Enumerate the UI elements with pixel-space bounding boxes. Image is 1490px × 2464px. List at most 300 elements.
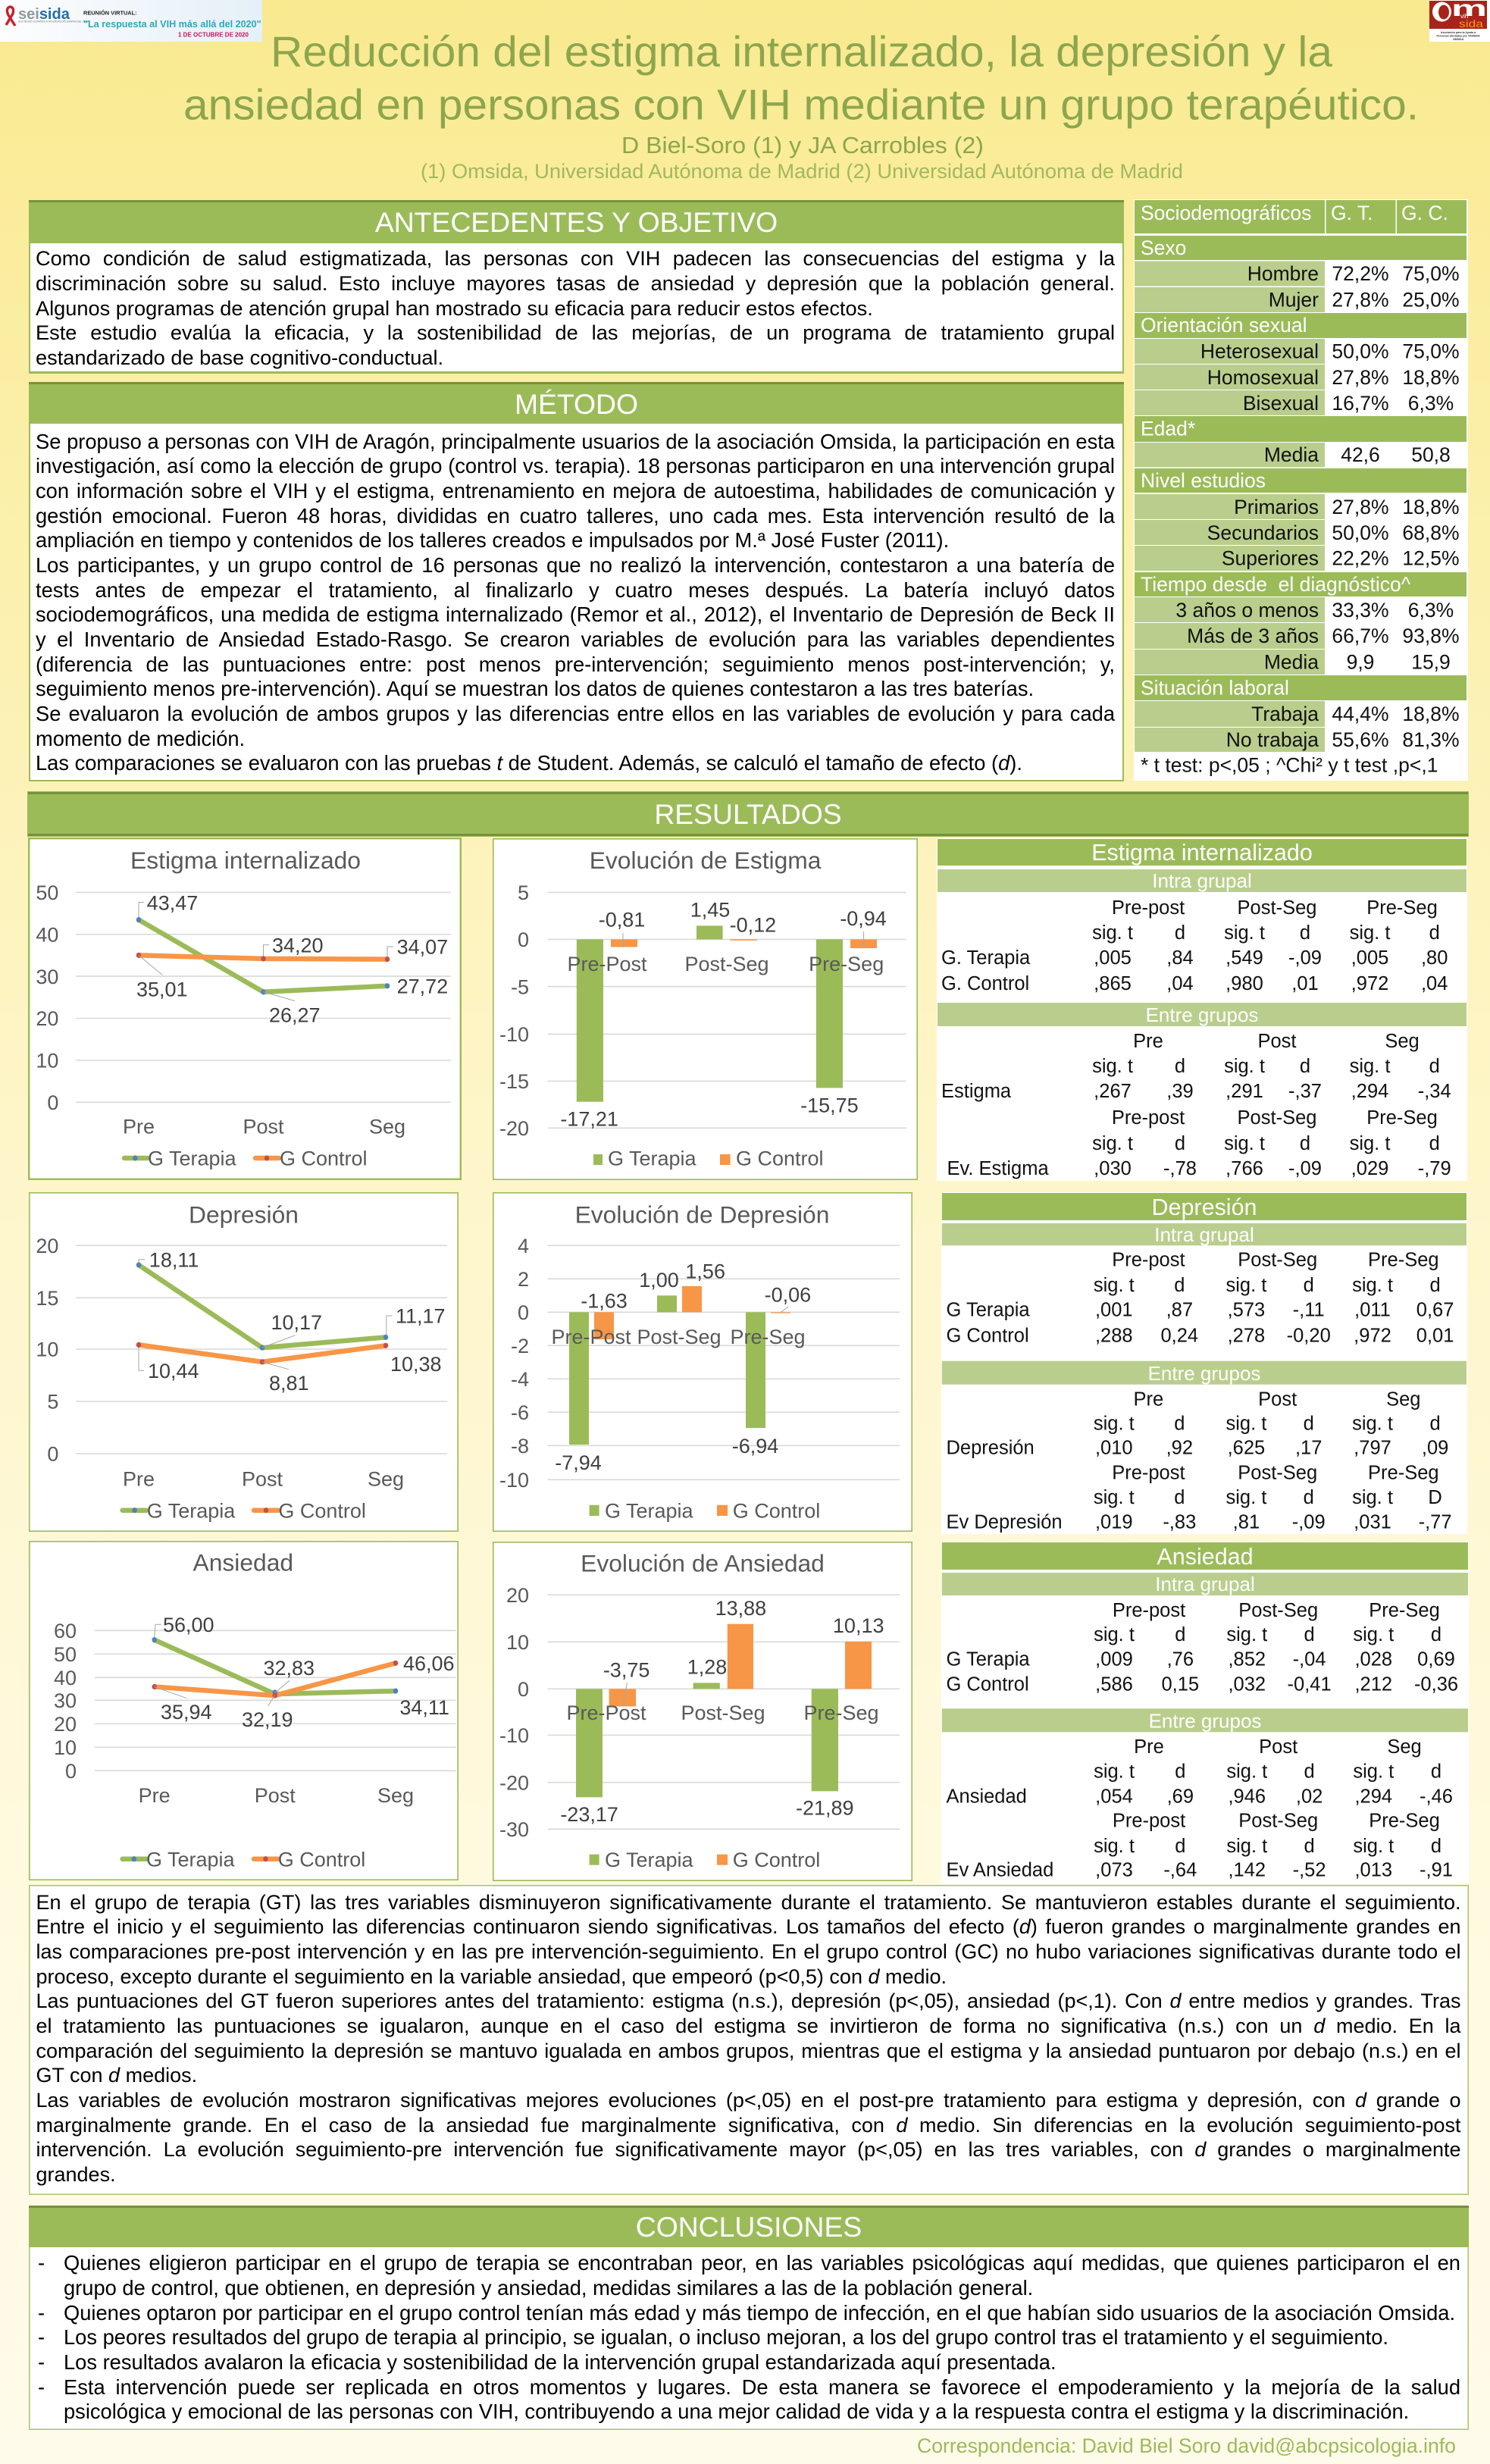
table: estigma internalizado: d — [1300, 1056, 1310, 1077]
panel: conclusiones: - — [38, 2350, 45, 2374]
chart: evolución de depresión: G Terapia — [605, 1499, 694, 1522]
table: estigma internalizado: ,291 — [1225, 1081, 1263, 1102]
table: ansiedad: Post-Seg — [1238, 1811, 1318, 1832]
chart: evolución de depresión: 4 — [518, 1235, 529, 1257]
chart: evolución de estigma: Pre-Seg — [809, 953, 884, 975]
chart: evolución de depresión: -0,06 — [765, 1283, 811, 1306]
chart: ansiedad: 32,83 — [264, 1657, 315, 1680]
chart: ansiedad: 56,00 — [163, 1614, 214, 1636]
table: ansiedad: Post — [1259, 1736, 1297, 1758]
table: estigma internalizado: sig. t — [1350, 1133, 1390, 1154]
text block: resultados discussion: las comparaciones pre-post intervención y en las pre intervención-seguimiento. En el grupo control (GC) no hubo variaciones significativas durante todo el — [36, 1940, 1461, 1963]
table: sociodemográficos: 3 años o menos — [1175, 599, 1319, 621]
chart: ansiedad — [29, 1541, 459, 1880]
table: sociodemográficos: 15,9 — [1411, 650, 1451, 673]
chart: evolución de estigma: -17,21 — [560, 1108, 618, 1131]
chart: evolución de ansiedad: 10,13 — [833, 1614, 884, 1637]
table: depresión: ,625 — [1228, 1437, 1265, 1458]
chart: evolución de depresión: -7,94 — [555, 1451, 602, 1474]
table: sociodemográficos: 27,8% — [1332, 366, 1389, 389]
text block: resultados discussion: marginalmente grande. En el caso de la ansiedad fue marginalmente significativa, con d medio. Sin diferencias en la evolución seguimiento-post — [36, 2114, 1461, 2137]
chart: evolución de ansiedad: 13,88 — [715, 1597, 766, 1620]
table: estigma internalizado: ,005 — [1351, 947, 1388, 969]
table: ansiedad: d — [1175, 1761, 1185, 1783]
table: estigma internalizado: d — [1300, 922, 1310, 944]
chart: estigma internalizado: 50 — [36, 881, 58, 904]
table: ansiedad: d — [1431, 1836, 1441, 1857]
text block: método: gestión emocional. Fueron 48 horas, divididas en cuatro talleres, uno cada mes. Esta intervención resultó de la — [36, 504, 1115, 528]
panel: conclusiones: - — [38, 2325, 45, 2349]
chart: evolución de depresión: -4 — [511, 1368, 529, 1391]
chart: depresión: 8,81 — [269, 1372, 309, 1395]
table: sociodemográficos: Edad* — [1141, 417, 1195, 440]
table: ansiedad: -,46 — [1420, 1786, 1453, 1807]
chart: estigma internalizado: 0 — [47, 1091, 58, 1114]
table: depresión: Post-Seg — [1238, 1250, 1317, 1271]
chart: evolución de ansiedad: -30 — [499, 1818, 529, 1841]
logo: omsida: vih — [1460, 13, 1468, 20]
table: estigma internalizado: -,79 — [1418, 1158, 1451, 1179]
text block: resultados discussion: proceso, excepto durante el seguimiento en la variable ansiedad, que empeoró (p<0,5) con d medio. — [36, 1965, 947, 1988]
chart: estigma internalizado: 26,27 — [269, 1004, 321, 1027]
text block: conclusiones: Los resultados avalaron la eficacia y sostenibilidad de la intervención grupal estandarizada aquí presentada. — [64, 2350, 1056, 2374]
chart: evolución de estigma — [493, 838, 918, 1180]
text block: resultados discussion — [36, 1891, 1461, 2186]
table: depresión: sig. t — [1225, 1275, 1266, 1296]
table: estigma internalizado: Pre-post — [1112, 897, 1185, 919]
table: sociodemográficos: * t test: p<,05 ; ^Chi² y t test ,p<,1 — [1141, 753, 1438, 776]
table: sociodemográficos: 18,8% — [1402, 366, 1460, 389]
chart: depresión: Pre — [123, 1467, 155, 1490]
text block: método: momento de medición. — [36, 727, 245, 750]
chart: estigma internalizado: 30 — [36, 966, 58, 988]
table: estigma internalizado: ,294 — [1351, 1081, 1388, 1102]
table: estigma internalizado: sig. t — [1350, 922, 1390, 944]
table: depresión: -,77 — [1419, 1511, 1452, 1533]
table: sociodemográficos: 72,2% — [1332, 262, 1389, 285]
table: depresión: sig. t — [1352, 1414, 1393, 1435]
table: sociodemográficos: 50,0% — [1332, 521, 1389, 544]
table: sociodemográficos: 18,8% — [1402, 703, 1460, 725]
table: estigma internalizado: Post — [1257, 1031, 1297, 1052]
chart: evolución de ansiedad: -20 — [499, 1771, 529, 1794]
text block: resultados discussion: En el grupo de terapia (GT) las tres variables disminuyeron significativamente durante el tratamiento. Se mantuvieron estables durante el seguimiento. — [36, 1891, 1461, 1914]
table: estigma internalizado: sig. t — [1092, 1056, 1133, 1077]
chart: evolución de estigma: -5 — [511, 975, 529, 998]
table: ansiedad: Pre-Seg — [1369, 1600, 1440, 1621]
table: ansiedad: d — [1431, 1624, 1441, 1645]
table: depresión: ,81 — [1233, 1511, 1260, 1533]
panel: conclusiones: - — [38, 2251, 45, 2275]
text block: método: Los participantes, y un grupo control de 16 personas que no realizó la intervención, contestaron a una batería de — [36, 553, 1115, 577]
table: ansiedad: ,009 — [1095, 1648, 1133, 1670]
chart: depresión — [29, 1192, 459, 1532]
table: ansiedad: Intra grupal — [1155, 1573, 1255, 1595]
text block: resultados discussion: GT con d medios. — [36, 2064, 197, 2087]
table: estigma internalizado: ,766 — [1225, 1158, 1263, 1179]
table: depresión: d — [1174, 1414, 1185, 1435]
table: ansiedad: ,294 — [1354, 1786, 1392, 1807]
chart: estigma internalizado: Seg — [369, 1116, 405, 1138]
table: sociodemográficos: 6,3% — [1408, 599, 1454, 621]
table: ansiedad: d — [1304, 1624, 1315, 1645]
table: depresión: ,09 — [1422, 1437, 1448, 1458]
table: estigma internalizado: Entre grupos — [1146, 1003, 1258, 1026]
table: depresión: -,83 — [1163, 1511, 1196, 1533]
table: depresión: G Control — [946, 1326, 1029, 1347]
chart: depresión: 15 — [36, 1287, 58, 1310]
table: estigma internalizado: ,005 — [1094, 947, 1132, 969]
table: sociodemográficos: Nivel estudios — [1141, 469, 1266, 492]
table: ansiedad: sig. t — [1226, 1624, 1267, 1645]
table: estigma internalizado: d — [1429, 1133, 1440, 1154]
table: ansiedad: sig. t — [1353, 1836, 1394, 1857]
table: ansiedad: ,69 — [1167, 1786, 1194, 1807]
panel: antecedentes y objetivo — [29, 200, 1124, 374]
chart: estigma internalizado: 10 — [36, 1050, 58, 1072]
table: estigma internalizado: ,80 — [1421, 947, 1448, 969]
table: depresión: d — [1304, 1487, 1314, 1508]
table: estigma internalizado: ,865 — [1094, 973, 1132, 994]
table: sociodemográficos: 55,6% — [1332, 728, 1389, 751]
table: ansiedad: Pre-post — [1113, 1600, 1185, 1621]
table: estigma internalizado: d — [1429, 922, 1440, 944]
logo: omsida — [1429, 0, 1490, 42]
table: estigma internalizado: sig. t — [1224, 922, 1265, 944]
table: depresión: d — [1430, 1275, 1441, 1296]
table: depresión: sig. t — [1094, 1275, 1135, 1296]
table: ansiedad: ,212 — [1354, 1674, 1392, 1695]
panel: conclusiones — [29, 2206, 1469, 2430]
table: estigma internalizado: Post-Seg — [1238, 897, 1316, 919]
text block: conclusiones — [38, 2251, 1460, 2423]
chart: ansiedad: 46,06 — [403, 1652, 455, 1675]
table: estigma internalizado: sig. t — [1092, 922, 1133, 944]
text block: antecedentes: estandarizado de base cognitivo-conductual. — [36, 346, 443, 369]
chart: evolución de estigma: 1,45 — [690, 899, 730, 922]
table: ansiedad: ,013 — [1354, 1860, 1392, 1881]
panel: método — [29, 382, 1124, 781]
chart: evolución de ansiedad: 1,28 — [687, 1656, 727, 1679]
table: ansiedad: -0,36 — [1414, 1674, 1458, 1695]
table: ansiedad: ,76 — [1167, 1648, 1194, 1670]
table: sociodemográficos: Superiores — [1222, 547, 1319, 570]
table: estigma internalizado: Pre — [1133, 1031, 1163, 1052]
table: sociodemográficos: 27,8% — [1332, 288, 1389, 311]
text block: antecedentes: Algunos programas de atención grupal han mostrado su eficacia para reducir estos efectos. — [36, 296, 873, 320]
table: ansiedad: Post-Seg — [1238, 1600, 1318, 1621]
table: ansiedad: ,852 — [1228, 1648, 1266, 1670]
table: sociodemográficos: No trabaja — [1226, 728, 1319, 751]
chart: ansiedad: G Control — [278, 1848, 365, 1871]
chart: evolución de depresión: Post-Seg — [637, 1326, 722, 1348]
text block: método: Las comparaciones se evaluaron con las pruebas t de Student. Además, se calculó el tamaño de efecto (d). — [36, 751, 1022, 775]
chart: ansiedad: 34,11 — [399, 1696, 449, 1719]
chart: evolución de estigma: -0,81 — [599, 909, 645, 931]
chart: evolución de estigma: -15 — [499, 1070, 529, 1093]
panel: conclusiones: - — [38, 2301, 45, 2325]
chart: estigma internalizado: 40 — [36, 923, 58, 946]
table: estigma internalizado: -,09 — [1288, 1158, 1322, 1179]
table: estigma internalizado: d — [1300, 1133, 1310, 1154]
table: depresión: Pre — [1134, 1389, 1163, 1410]
heading: conclusiones — [29, 2206, 1469, 2247]
table: sociodemográficos: Bisexual — [1243, 392, 1319, 415]
heading: método — [29, 382, 1124, 424]
chart: evolución de estigma: 0 — [518, 928, 529, 951]
chart: evolución de ansiedad: 10 — [506, 1631, 529, 1654]
affiliations: (1) Omsida, Universidad Autónoma de Madrid (2) Universidad Autónoma de Madrid — [421, 160, 1183, 183]
table: estigma internalizado: Estigma — [941, 1081, 1012, 1102]
correspondence: Correspondencia: David Biel Soro david@abcpsicologia.info — [917, 2434, 1456, 2457]
heading: resultados — [28, 792, 1468, 836]
table: depresión: ,797 — [1354, 1437, 1391, 1458]
table: ansiedad: d — [1304, 1761, 1315, 1783]
chart: depresión: Post — [242, 1467, 283, 1490]
table: sociodemográficos: 6,3% — [1408, 392, 1454, 415]
table: estigma internalizado — [937, 838, 1467, 1181]
text block: resultados discussion: Las variables de evolución mostraron significativas mejores evoluciones (p<,05) en el post-pre tratamiento para estigma y depresión, con d grande o — [36, 2089, 1461, 2112]
table: depresión: sig. t — [1225, 1414, 1266, 1435]
text block: resultados discussion: Entre el inicio y el seguimiento las diferencias continuaron siendo significativas. Los tamaños del efecto (d) fueron grandes o marginalmente grandes en — [36, 1915, 1461, 1938]
table: estigma internalizado: Post-Seg — [1238, 1107, 1316, 1129]
table: sociodemográficos: 25,0% — [1402, 288, 1460, 311]
text block: método: ampliación en tiempo y contenidos de los talleres creados e impulsados por M.ª José Fuster (2011). — [36, 528, 949, 552]
table: depresión: -0,20 — [1287, 1326, 1331, 1347]
table: sociodemográficos: 50,8 — [1411, 443, 1451, 466]
table: depresión: 0,24 — [1160, 1326, 1198, 1347]
chart: evolución de ansiedad: 0 — [518, 1678, 529, 1701]
text block: método: investigación, así como la elección de grupo (control vs. terapia). 18 personas participaron en una intervención grupal — [36, 454, 1115, 477]
text block: conclusiones: Los peores resultados del grupo de terapia al principio, se igualan, o incluso mejoran, a los del grupo control tras el tratamiento y el seguimiento. — [64, 2325, 1388, 2349]
heading: antecedentes: ANTECEDENTES Y OBJETIVO — [375, 206, 778, 238]
table: depresión: Entre grupos — [1148, 1362, 1260, 1385]
table: depresión: Pre-Seg — [1368, 1463, 1439, 1484]
chart: evolución de estigma: Pre-Post — [567, 953, 647, 975]
table: depresión: sig. t — [1352, 1275, 1393, 1296]
chart: ansiedad: Pre — [139, 1784, 171, 1807]
table: ansiedad: sig. t — [1094, 1761, 1135, 1783]
table: estigma internalizado: ,39 — [1166, 1081, 1194, 1102]
chart: evolución de depresión: -10 — [499, 1469, 529, 1492]
table: sociodemográficos: Orientación sexual — [1141, 314, 1307, 337]
table: depresión: -,09 — [1292, 1511, 1326, 1533]
chart: evolución de estigma: 5 — [518, 881, 529, 904]
chart: estigma internalizado: 43,47 — [147, 891, 198, 914]
heading: antecedentes — [29, 200, 1124, 243]
table: ansiedad: ,054 — [1095, 1786, 1133, 1807]
table: sociodemográficos: 75,0% — [1402, 262, 1460, 285]
table: ansiedad: ,02 — [1296, 1786, 1323, 1807]
table: sociodemográficos: 27,8% — [1332, 496, 1389, 518]
logo: omsida: OMSIDA — [1453, 38, 1464, 41]
table: sociodemográficos: Heterosexual — [1200, 340, 1319, 362]
chart: evolución de depresión: Pre-Post — [551, 1326, 631, 1348]
chart: evolución de depresión: 1,56 — [685, 1260, 725, 1282]
chart: ansiedad: 60 — [54, 1620, 77, 1642]
logo: seisida meeting banner: REUNIÓN VIRTUAL: — [83, 9, 137, 17]
text block: resultados discussion: Las puntuaciones del GT fueron superiores antes del tratamiento: estigma (n.s.), depresión (p<,05), ansiedad (p<,1). Con d entre medios y grandes. Tras — [36, 1990, 1461, 2012]
table: estigma internalizado: ,549 — [1225, 947, 1263, 969]
text block: método: seguimiento menos pre-intervención). Aquí se muestran los datos de quienes contestaron a las tres baterías. — [36, 677, 1034, 700]
table: sociodemográficos: Media — [1264, 443, 1319, 466]
chart: evolución de ansiedad: Pre-Seg — [803, 1702, 879, 1724]
chart: evolución de ansiedad: -10 — [499, 1724, 529, 1747]
table: estigma internalizado: sig. t — [1224, 1133, 1265, 1154]
table: depresión: Post-Seg — [1238, 1463, 1317, 1484]
chart: evolución de ansiedad: Post-Seg — [681, 1702, 765, 1724]
chart: evolución de depresión: 1,00 — [639, 1269, 679, 1291]
chart: estigma internalizado: Pre — [123, 1116, 155, 1138]
table: ansiedad: G Control — [946, 1674, 1029, 1695]
chart: ansiedad: 35,94 — [161, 1701, 212, 1724]
table: ansiedad: sig. t — [1226, 1761, 1267, 1783]
table: ansiedad: Pre-post — [1113, 1811, 1185, 1832]
table: estigma internalizado: -,09 — [1288, 947, 1322, 969]
chart: evolución de depresión: Evolución de Depresión — [575, 1201, 829, 1228]
table: estigma internalizado: ,030 — [1094, 1158, 1132, 1179]
table: depresión: 0,67 — [1416, 1300, 1454, 1321]
table: sociodemográficos — [1134, 199, 1468, 781]
table: depresión: Depresión — [1151, 1194, 1257, 1220]
chart: ansiedad: 40 — [54, 1667, 77, 1689]
title: Reducción del estigma internalizado, la depresión y la — [271, 27, 1333, 75]
table: sociodemográficos: Secundarios — [1207, 521, 1319, 544]
chart: ansiedad: 32,19 — [242, 1708, 293, 1731]
table: estigma internalizado: ,267 — [1094, 1081, 1132, 1102]
table: estigma internalizado: -,78 — [1163, 1158, 1197, 1179]
table: depresión: Pre-post — [1112, 1250, 1185, 1271]
chart: estigma internalizado: 34,07 — [397, 936, 448, 959]
table: ansiedad: -0,41 — [1288, 1674, 1332, 1695]
chart: estigma internalizado — [28, 838, 462, 1180]
chart: estigma internalizado: G Control — [280, 1147, 368, 1170]
logo: seisida meeting banner — [0, 0, 262, 42]
text block: método: (diferencia de las puntuaciones entre: post menos pre-intervención; seguimiento menos post-intervención; y, — [36, 653, 1115, 676]
text block: resultados discussion: grandes. — [36, 2163, 116, 2186]
table: estigma internalizado: sig. t — [1350, 1056, 1390, 1077]
chart: evolución de depresión: -8 — [511, 1435, 529, 1457]
table: depresión: ,011 — [1354, 1300, 1391, 1321]
table: ansiedad: -,91 — [1420, 1860, 1453, 1881]
table: ansiedad: Ansiedad — [1157, 1544, 1254, 1570]
chart: evolución de ansiedad — [493, 1542, 912, 1881]
table: estigma internalizado: Pre-post — [1112, 1107, 1185, 1129]
table: sociodemográficos: 81,3% — [1402, 728, 1460, 751]
table: depresión: Ev Depresión — [946, 1511, 1063, 1533]
chart: evolución de depresión: -1,63 — [581, 1289, 628, 1312]
chart: evolución de ansiedad: G Control — [733, 1849, 820, 1871]
table: estigma internalizado: Ev. Estigma — [947, 1158, 1049, 1179]
table: sociodemográficos: 9,9 — [1347, 650, 1374, 673]
logo: omsida: sida — [1459, 17, 1483, 30]
table: ansiedad: sig. t — [1094, 1836, 1135, 1857]
table: ansiedad: 0,69 — [1417, 1648, 1455, 1670]
table: ansiedad: Ansiedad — [946, 1786, 1027, 1807]
chart: depresión: 5 — [47, 1391, 58, 1414]
table: estigma internalizado: G. Control — [941, 973, 1029, 994]
table: depresión: -,11 — [1293, 1300, 1325, 1321]
text block: antecedentes: discriminación sobre su salud. Esto incluye mayores tasas de ansiedad y depresión que la población general. — [36, 271, 1115, 295]
table: depresión — [941, 1192, 1467, 1534]
table: sociodemográficos: Trabaja — [1251, 703, 1319, 725]
table: sociodemográficos: 16,7% — [1332, 392, 1389, 415]
chart: ansiedad: 30 — [54, 1689, 77, 1712]
table: ansiedad: d — [1304, 1836, 1315, 1857]
table: ansiedad: Pre-Seg — [1369, 1811, 1440, 1832]
chart: depresión: Depresión — [189, 1201, 299, 1228]
text block: conclusiones: Quienes eligieron participar en el grupo de terapia se encontraban peor, en las variables psicológicas aquí medidas, que quienes participaron el en — [64, 2251, 1460, 2275]
table: sociodemográficos: Situación laboral — [1141, 676, 1289, 699]
table: sociodemográficos: Media — [1264, 650, 1319, 673]
table: estigma internalizado: ,04 — [1421, 973, 1448, 994]
chart: depresión: G Terapia — [147, 1499, 236, 1522]
table: estigma internalizado: d — [1175, 1133, 1185, 1154]
text block: conclusiones: Esta intervención puede ser replicada en otros momentos y lugares. De esta manera se favorece el empoderamiento y la mejoría de la salud — [64, 2375, 1460, 2399]
chart: ansiedad: 10 — [54, 1736, 77, 1759]
chart: evolución de depresión: Pre-Seg — [730, 1326, 806, 1348]
chart: depresión: G Control — [278, 1499, 366, 1522]
table: depresión: d — [1430, 1414, 1441, 1435]
table: estigma internalizado: -,34 — [1418, 1081, 1451, 1102]
table: estigma internalizado: Pre-Seg — [1366, 1107, 1438, 1129]
chart: evolución de estigma: G Terapia — [608, 1147, 697, 1170]
chart: ansiedad: 0 — [65, 1760, 77, 1783]
table: estigma internalizado: ,980 — [1225, 973, 1263, 994]
table: sociodemográficos: Tiempo desde el diagnóstico^ — [1141, 573, 1411, 596]
table: ansiedad: ,586 — [1095, 1674, 1133, 1695]
table: depresión: Intra grupal — [1154, 1223, 1254, 1246]
chart: depresión: 10,17 — [271, 1311, 322, 1334]
table: estigma internalizado: ,84 — [1166, 947, 1194, 969]
chart: evolución de depresión: -2 — [511, 1335, 529, 1357]
table: sociodemográficos: 18,8% — [1402, 496, 1460, 518]
table: ansiedad: d — [1175, 1624, 1185, 1645]
table: sociodemográficos: 42,6 — [1341, 443, 1380, 466]
logo: seisida meeting banner: "La respuesta al VIH más allá del 2020" — [83, 19, 261, 30]
table: sociodemográficos: 93,8% — [1402, 625, 1460, 647]
table: estigma internalizado: Intra grupal — [1152, 869, 1252, 892]
chart: evolución de depresión: 0 — [518, 1301, 529, 1324]
chart: evolución de estigma: G Control — [736, 1147, 824, 1170]
table: sociodemográficos: 68,8% — [1402, 521, 1460, 544]
table: estigma internalizado: ,01 — [1291, 973, 1319, 994]
table: ansiedad: ,028 — [1354, 1648, 1392, 1670]
table: sociodemográficos: Homosexual — [1207, 366, 1319, 389]
text block: resultados discussion: intervención. La evolución seguimiento-pre intervención fue significativamente mayor (p<,05) en las tres variables, con d grandes o marginalmente — [36, 2138, 1461, 2161]
table: ansiedad: G Terapia — [946, 1648, 1030, 1670]
table: depresión: ,001 — [1095, 1300, 1133, 1321]
table: depresión: D — [1428, 1487, 1442, 1508]
chart: estigma internalizado: 27,72 — [397, 975, 448, 998]
table: ansiedad: ,032 — [1228, 1674, 1266, 1695]
table: ansiedad: Pre — [1134, 1736, 1164, 1758]
text block: antecedentes — [36, 246, 1115, 369]
text block: método — [36, 430, 1116, 775]
table: ansiedad: -,52 — [1293, 1860, 1326, 1881]
chart: evolución de depresión: -6,94 — [732, 1435, 778, 1457]
text block: resultados discussion: comparación del seguimiento la depresión se mantuvo igualada en ambos grupos, mientras que el estigma y la ansiedad puntuaron por debajo (n.s.) en el — [36, 2040, 1461, 2062]
table: depresión: ,288 — [1095, 1326, 1133, 1347]
chart: evolución de estigma: -0,12 — [730, 914, 776, 937]
table: depresión: ,573 — [1228, 1300, 1265, 1321]
logo: seisida meeting banner: 1 DE OCTUBRE DE 2020 — [178, 32, 249, 38]
chart: estigma internalizado: Estigma internalizado — [130, 847, 361, 874]
heading: conclusiones: CONCLUSIONES — [636, 2211, 862, 2243]
chart: evolución de estigma: Evolución de Estigma — [590, 847, 822, 874]
logo: omsida: Personas afectadas por VIH/SIDA — [1436, 35, 1480, 38]
chart: evolución de ansiedad: Evolución de Ansiedad — [581, 1550, 825, 1577]
